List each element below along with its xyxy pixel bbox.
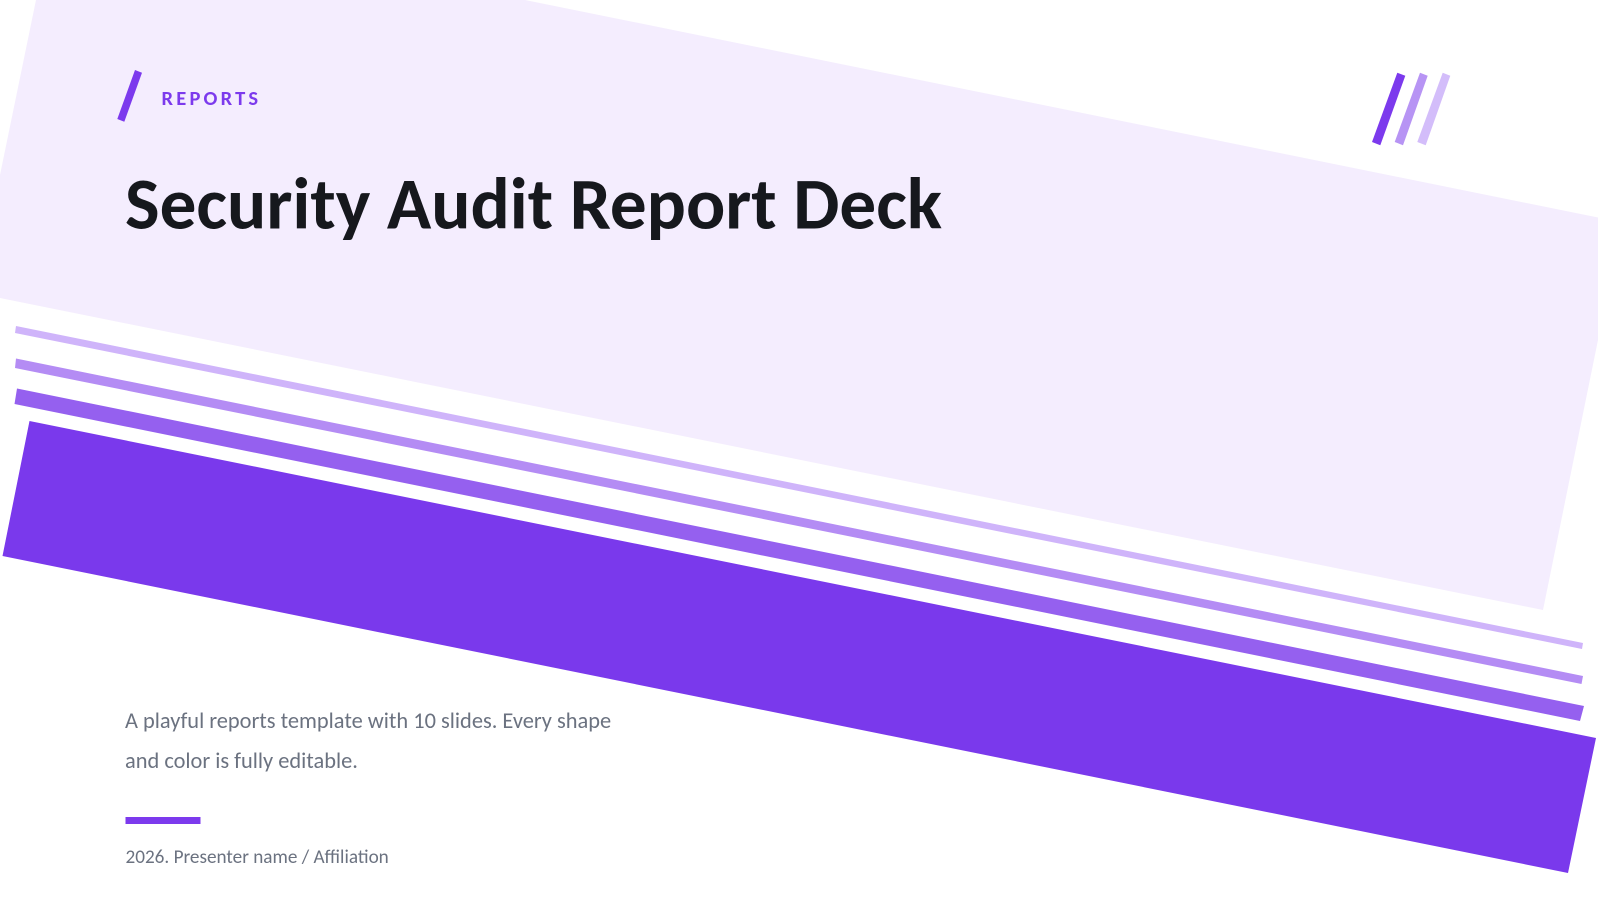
- subtitle text: and color is fully editable.: [125, 748, 358, 775]
- stripe: darker: [14, 388, 1584, 721]
- accent rule: [126, 817, 200, 824]
- eyebrow label: REPORTS: [162, 85, 261, 111]
- stripe: medium: [15, 358, 1583, 684]
- panel: light lavender slanted background: [0, 0, 1598, 610]
- stripe: lightest: [15, 326, 1583, 649]
- icon: triple slash mark: [1372, 73, 1450, 145]
- subtitle text: A playful reports template with 10 slides. Every shape: [125, 708, 611, 735]
- title: Security Audit Report Deck: [125, 158, 942, 248]
- panel: solid purple slanted band: [2, 421, 1596, 873]
- icon: eyebrow slash: [117, 70, 142, 122]
- presenter line: 2026. Presenter name / Affiliation: [126, 846, 389, 869]
